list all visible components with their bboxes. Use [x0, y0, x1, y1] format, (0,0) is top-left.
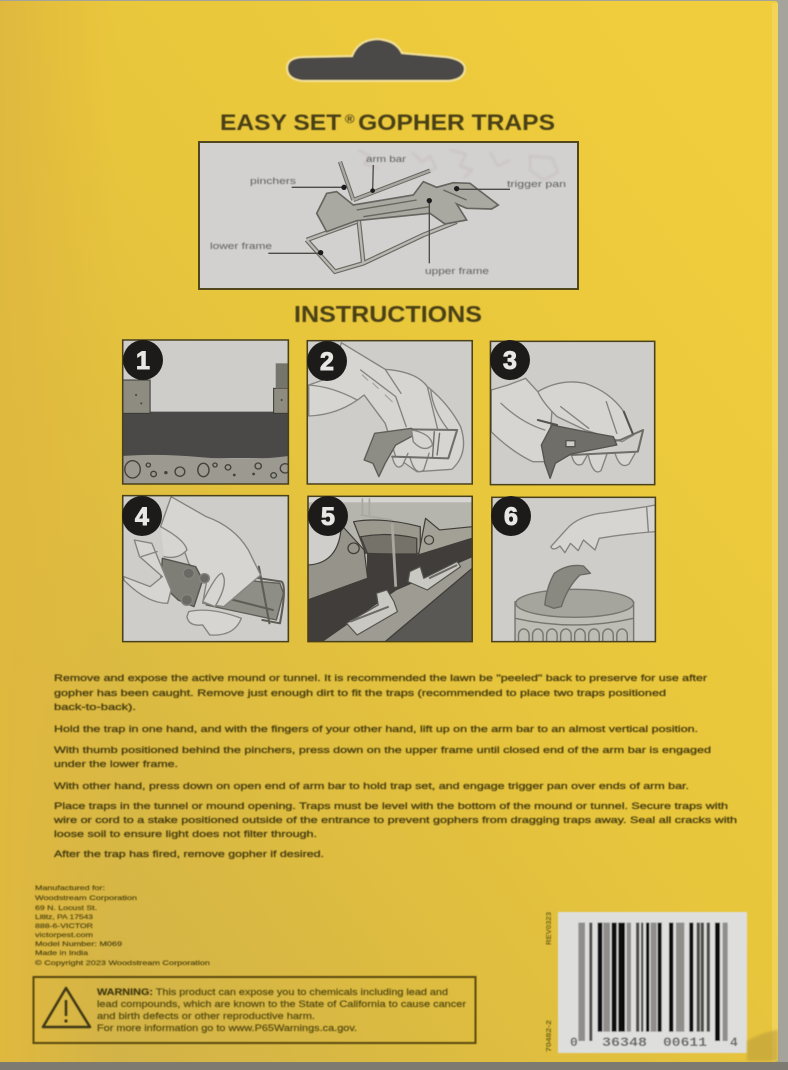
- barcode digits: [570, 1035, 738, 1050]
- badge 4: 4: [135, 503, 149, 531]
- instruction text: wire or cord to a stake positioned outside of the entrance to prevent gophers from dragging traps away. Seal all cracks with: [53, 815, 737, 826]
- side print codes: 70482-2: [546, 1020, 553, 1052]
- manufacturer info: Model Number: M069: [35, 941, 123, 948]
- diagram labels: [210, 154, 566, 277]
- instruction text: Hold the trap in one hand, and with the fingers of your other hand, lift up on the arm bar to an almost vertical position.: [54, 724, 698, 735]
- title: GOPHER TRAPS: [358, 110, 555, 135]
- instruction text: After the trap has fired, remove gopher if desired.: [54, 849, 324, 860]
- badge 1: [123, 340, 163, 380]
- manufacturer info: © Copyright 2023 Woodstream Corporation: [35, 959, 211, 967]
- side print codes: REV0323: [546, 912, 553, 945]
- manufacturer info: [35, 885, 211, 967]
- instruction text: loose soil to ensure light does not filter through.: [54, 829, 317, 840]
- manufacturer info: 69 N. Locust St.: [35, 905, 97, 912]
- diagram labels: trigger pan: [507, 179, 566, 190]
- panel: step 2: [307, 341, 472, 484]
- hang hole: [287, 39, 465, 81]
- instruction text: under the lower frame.: [54, 759, 178, 770]
- instruction text: gopher has been caught. Remove just enough dirt to fit the traps (recommended to place two traps positioned: [54, 688, 666, 699]
- manufacturer info: Woodstream Corporation: [35, 895, 138, 902]
- title: ®: [341, 112, 358, 126]
- manufacturer info: Made in India: [35, 950, 89, 957]
- side print codes: [546, 912, 553, 1052]
- barcode digits: 4: [730, 1035, 738, 1050]
- badge 4: [122, 496, 162, 536]
- instruction text: With thumb positioned behind the pinchers, press down on the upper frame until closed end of the arm bar is engaged: [54, 745, 711, 756]
- leader lines: [268, 165, 510, 263]
- warning text: [97, 987, 466, 1033]
- icon: warning triangle: [43, 988, 90, 1027]
- step panels: [122, 340, 655, 642]
- warning text: lead compounds, which are known to the State of California to cause cancer: [97, 999, 466, 1009]
- diagram labels: upper frame: [425, 266, 489, 277]
- faint show-through marks: [358, 150, 558, 180]
- panel: trap diagram: [199, 142, 578, 289]
- badge 6: 6: [504, 503, 518, 531]
- instruction text: With other hand, press down on open end of arm bar to hold trap set, and engage trigger pan over ends of arm bar.: [54, 781, 689, 792]
- badge 2: 2: [320, 348, 334, 376]
- panel: step 6: [491, 496, 655, 642]
- title: EASY SET: [220, 110, 331, 135]
- barcode: [558, 912, 747, 1053]
- worn corner near barcode: [747, 1030, 778, 1061]
- badge 5: [308, 496, 348, 536]
- instruction text: [53, 673, 737, 860]
- badge 1: 1: [136, 347, 150, 375]
- manufacturer info: 888-6-VICTOR: [35, 923, 94, 930]
- warning text: For more information go to www.P65Warnings.ca.gov.: [97, 1023, 357, 1033]
- panel: step 4: [122, 496, 288, 642]
- badge 5: 5: [321, 503, 335, 531]
- manufacturer info: Manufactured for:: [35, 885, 105, 892]
- instruction text: Place traps in the tunnel or mound opening. Traps must be level with the bottom of the mound or tunnel. Secure traps with: [54, 801, 728, 812]
- badge 2: [307, 341, 347, 381]
- manufacturer info: Lititz, PA 17543: [35, 914, 94, 921]
- badge 3: [490, 340, 530, 380]
- badge 3: 3: [503, 347, 517, 375]
- panel: step 3: [490, 340, 655, 485]
- illustration: gopher trap: [268, 162, 510, 272]
- badge 6: [491, 496, 531, 536]
- barcode digits: 00611: [663, 1035, 707, 1050]
- instruction text: Remove and expose the active mound or tunnel. It is recommended the lawn be "peeled" back to preserve for use after: [54, 673, 708, 684]
- warning box: [34, 977, 476, 1043]
- panel: step 5: [308, 496, 472, 642]
- manufacturer info: victorpest.com: [35, 932, 93, 939]
- instruction text: back-to-back).: [54, 702, 136, 713]
- warning text: and birth defects or other reproductive harm.: [97, 1011, 315, 1021]
- diagram labels: pinchers: [250, 176, 296, 187]
- warning text: WARNING: This product can expose you to chemicals including lead and: [97, 987, 448, 997]
- barcode digits: 36348: [602, 1035, 647, 1050]
- diagram labels: arm bar: [366, 154, 406, 165]
- barcode digits: 0: [570, 1035, 578, 1050]
- instructions heading: INSTRUCTIONS: [294, 301, 482, 327]
- diagram labels: lower frame: [210, 241, 272, 252]
- panel: step 1: [123, 340, 290, 484]
